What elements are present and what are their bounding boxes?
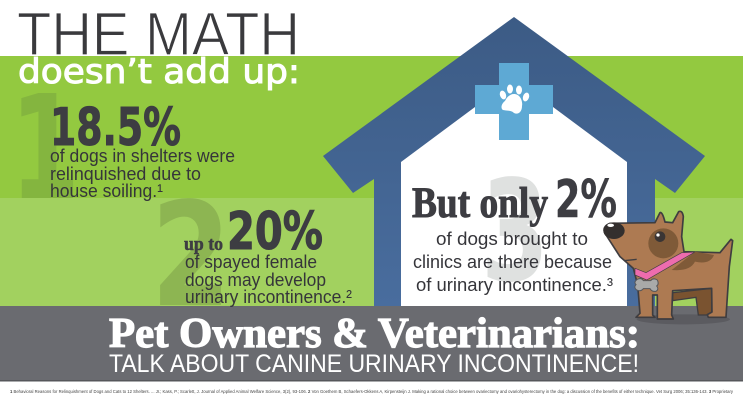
illustration: dog xyxy=(603,211,733,324)
stat: up to: up to xyxy=(184,234,223,255)
text: shelter dogs description: of dogs in shelters were xyxy=(50,145,235,166)
divider band shadow xyxy=(0,380,743,382)
title: THE MATH: THE MATH xyxy=(17,0,300,68)
stat: 20%: 20% xyxy=(227,202,323,262)
panel: lower green band xyxy=(0,198,743,306)
panel: top green band xyxy=(0,56,743,198)
stat: 18.5%: 18.5% xyxy=(50,98,181,158)
heading: Pet Owners & Veterinarians: Pet Owners & Veterinarians: xyxy=(109,311,640,357)
text: spayed dogs description: dogs may develop xyxy=(185,269,326,290)
text: spayed dogs description xyxy=(185,251,352,307)
subheading: talk about incontinence: TALK ABOUT CANINE URINARY INCONTINENCE! xyxy=(109,350,639,378)
stat: 2%: 2% xyxy=(555,170,617,230)
footnotes: 1 Behavioral Reasons for Relinquishment of Dogs and Cats to 12 Shelters. ... Jr.; Kass, P.; Scarlett, J. Journal of Applied Animal Welfare Science, 3(2), 93-106. 2 Von Goethem B, Schaefers-Okkens A, Kirpensteijn J. Making a rational choice between ovariectomy and ovariohysterectomy in the dog: a discussion of the benefits of either technique. Vet Surg 2006; 35:136-143. 3 Proprietary xyxy=(10,389,734,394)
text: clinic visits description: of urinary incontinence.³ xyxy=(416,274,613,295)
stat: But only: But only xyxy=(412,180,548,227)
text: shelter dogs description xyxy=(50,145,235,201)
text: clinic visits description: of dogs brought to xyxy=(436,228,588,249)
icon: paw print xyxy=(499,84,530,114)
text: clinic visits description: clinics are there because xyxy=(413,251,612,272)
text: spayed dogs description: of spayed female xyxy=(185,251,317,272)
panel: footer gray band xyxy=(0,306,743,381)
text: spayed dogs description: urinary incontinence.² xyxy=(185,286,352,307)
text: shelter dogs description: relinquished due to xyxy=(50,163,201,184)
text: clinic visits description xyxy=(413,228,613,295)
house white interior xyxy=(401,78,627,306)
stat block 2 xyxy=(184,202,352,307)
house xyxy=(323,17,705,306)
big numeral 2: 2 xyxy=(151,171,231,339)
subtitle: doesn't add up: doesn’t add up: xyxy=(18,52,300,92)
stat block 3 xyxy=(412,170,617,295)
big numeral 3: 3 xyxy=(481,151,549,314)
house outline and roof xyxy=(323,17,705,306)
stat block 1 xyxy=(50,98,235,201)
text: shelter dogs description: house soiling.¹ xyxy=(50,180,163,201)
big numeral 1: 1 xyxy=(10,64,80,232)
icon: medical cross with paw xyxy=(475,63,553,140)
